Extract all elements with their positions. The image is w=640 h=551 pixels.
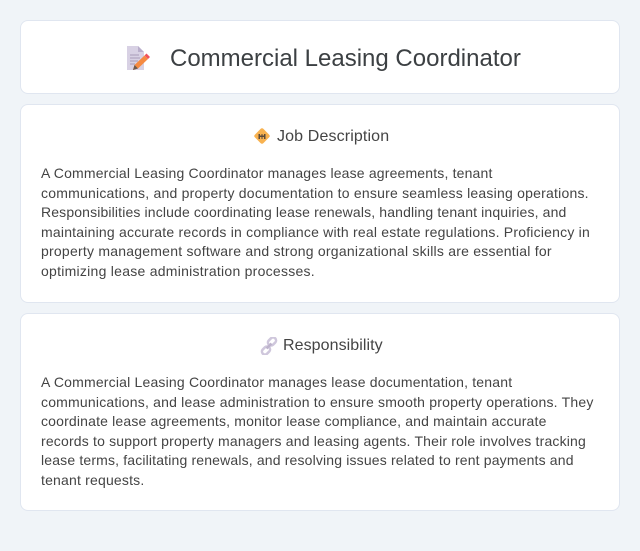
icon: chain link bbox=[260, 337, 278, 355]
text: job description body: A Commercial Leasing Coordinator manages lease agreements, tenant bbox=[41, 165, 493, 181]
text: responsibility body: lease terms, facilitating renewals, and resolving issues related to rent payments and bbox=[41, 452, 574, 468]
text: responsibility body bbox=[41, 374, 594, 488]
text: responsibility body: tenant requests. bbox=[41, 472, 144, 488]
panel: responsibility bbox=[20, 313, 620, 511]
text: responsibility body: A Commercial Leasing Coordinator manages lease documentation, tenant bbox=[41, 374, 512, 390]
text: responsibility body: communications, and lease administration to ensure smooth property operations. They bbox=[41, 394, 594, 410]
text: responsibility body: records to support property managers and leasing agents. Their role involves tracking bbox=[41, 433, 586, 449]
panel: job description bbox=[20, 104, 620, 303]
text: job description body: Responsibilities include coordinating lease renewals, handling tenant inquiries, and bbox=[41, 204, 566, 220]
text: job description body: maintaining accurate records in compliance with real estate regulations. Proficiency in bbox=[41, 224, 590, 240]
text: job description body bbox=[41, 165, 590, 279]
panel: title card bbox=[20, 20, 620, 94]
icon: document with pencil bbox=[127, 46, 150, 70]
icon: construction diamond bbox=[254, 128, 270, 144]
heading: job description: Job Description bbox=[277, 128, 389, 145]
text: job description body: property management software and strong organizational skills are essential for bbox=[41, 243, 552, 259]
text: job description body: optimizing lease administration processes. bbox=[41, 263, 315, 279]
text: job description body: communications, and property documentation to ensure seamless leasing operations. bbox=[41, 185, 589, 201]
title: Commercial Leasing Coordinator bbox=[170, 45, 521, 72]
heading: responsibility: Responsibility bbox=[283, 337, 383, 354]
text: responsibility body: coordinate lease agreements, monitor lease compliance, and maintain accurate bbox=[41, 413, 547, 429]
